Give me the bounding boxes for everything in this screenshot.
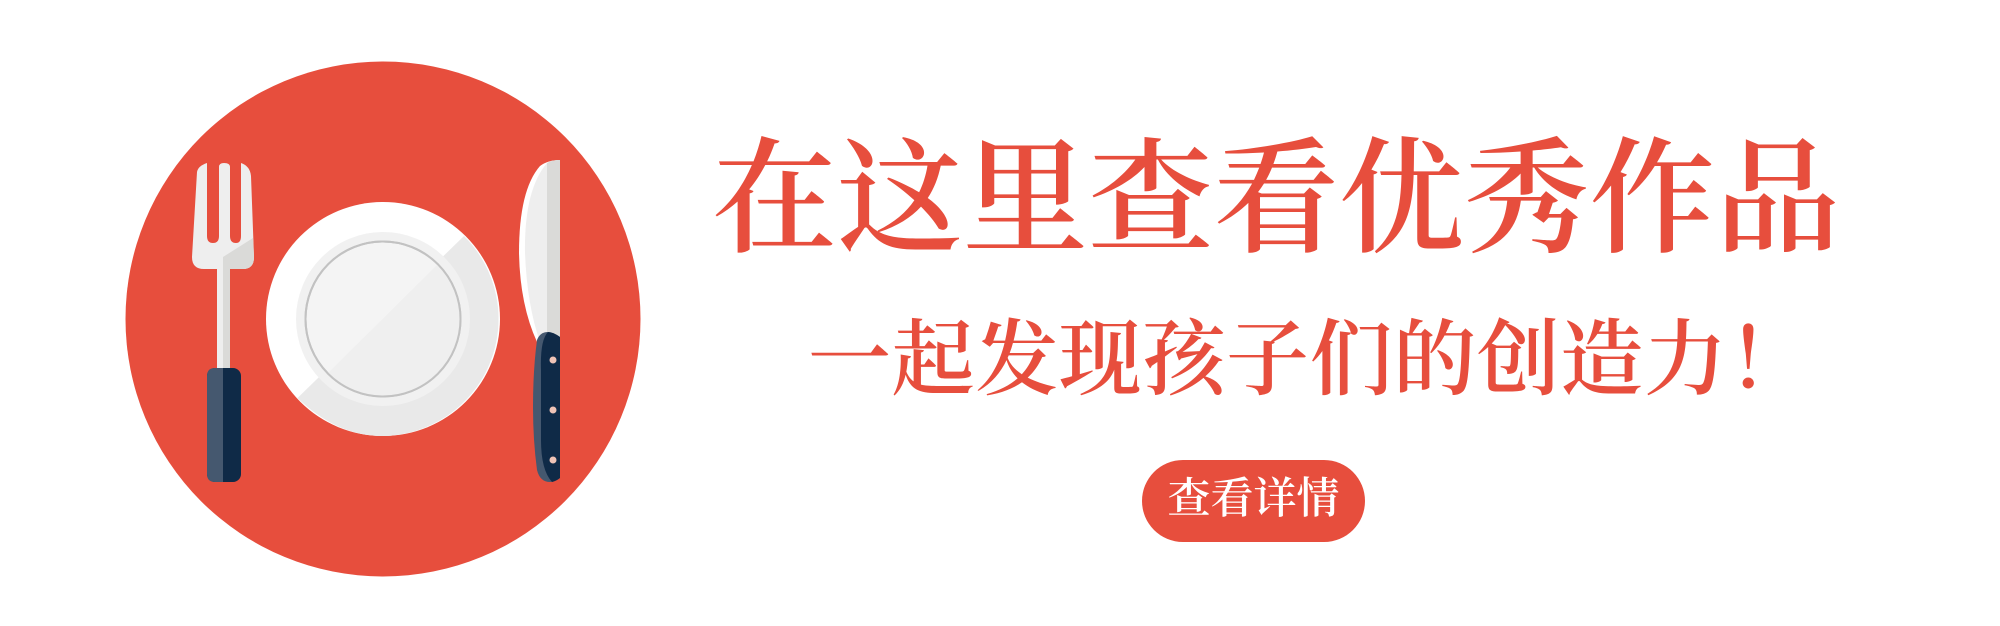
illustration: plate, fork and knife badge (126, 62, 640, 576)
icon: fork (192, 163, 254, 482)
icon: plate (266, 202, 500, 436)
button: view details (1142, 460, 1365, 542)
subtitle: 一起发现孩子们的创造力！ (808, 314, 1811, 406)
icon: knife (519, 160, 560, 482)
title: 在这里查看优秀作品 (712, 132, 1841, 270)
button label: 查看详情 (1168, 476, 1340, 523)
red circle background (126, 62, 640, 576)
